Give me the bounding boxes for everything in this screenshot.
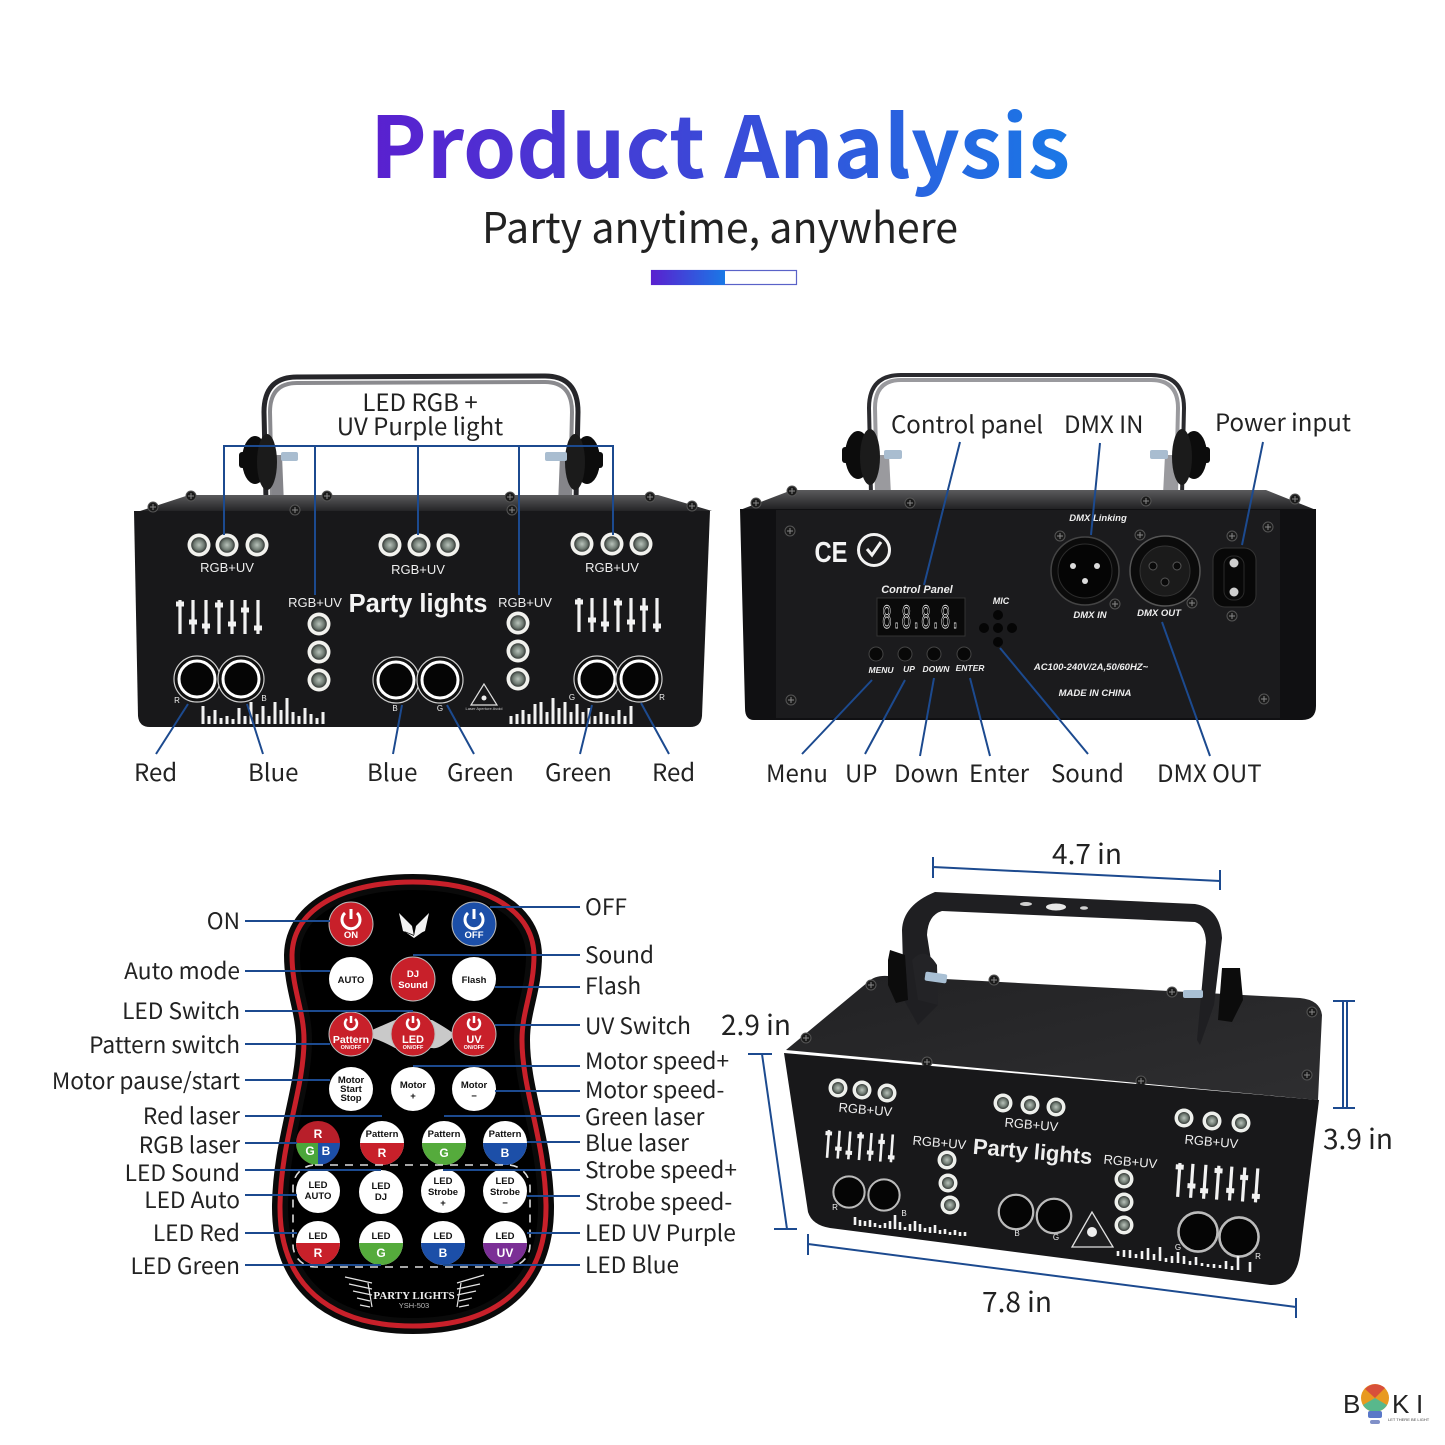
right labels: Strobe speed+ [585,1152,737,1185]
button OFF [452,902,496,946]
button Pattern G: G [439,1146,449,1160]
remote body [280,882,546,1326]
panel: front view of light [134,376,712,788]
mic [979,596,1017,647]
dimension height 3.9 in [1323,1001,1393,1158]
laser warning triangle: Laser Aperture Avoid [465,706,503,711]
callout: LED RGB + UV [224,383,613,595]
button RGB: G [305,1144,315,1158]
handle rear [869,375,1184,495]
party lights logo: YSH-503 [399,1301,429,1310]
button LED R: R [314,1246,323,1260]
left labels: Red laser [143,1098,240,1131]
labels 3D: Party lights [972,1134,1093,1169]
labels 3D: RGB+UV [1103,1152,1158,1171]
device labels [174,560,665,713]
top labels rear: Power input [1215,403,1351,438]
right leader lines [413,907,580,1265]
device labels: R [174,696,180,705]
right labels [585,889,737,1280]
labels 3D: RGB+UV [1004,1115,1059,1134]
button Motor Start Stop [329,1067,373,1111]
dimension width 4.7 in: 4.7 in [1052,833,1122,873]
right labels: LED Blue [585,1247,679,1280]
bottom callouts front: Red [652,753,695,788]
button LED B: LED [434,1231,453,1242]
button LED AUTO [296,1169,340,1213]
button Pattern R: R [378,1146,387,1160]
button LED Strobe minus [483,1169,527,1213]
panel: remote control [52,882,737,1326]
right labels: Motor speed+ [585,1043,729,1076]
labels 3D: R [832,1203,838,1212]
bottom labels rear: Menu [766,754,828,789]
party lights logo: PARTY LIGHTS [373,1290,455,1302]
lenses [174,656,662,703]
button LED R [296,1221,340,1265]
DMX OUT connector [1130,536,1200,606]
right labels: UV Switch [585,1008,691,1041]
button LED UV: LED [496,1231,515,1242]
bottom labels rear: Down [894,754,959,789]
button LED Strobe minus: Strobe [490,1187,520,1198]
button LED [391,1012,435,1056]
left labels: LED Switch [122,993,240,1026]
power input [1213,548,1256,607]
button DJ Sound: DJ [407,969,419,980]
panel buttons: UP [903,664,915,674]
dimension length 7.8 in [808,1234,1296,1321]
laser warning triangle [465,684,503,711]
title: Product Analysis [370,80,1070,203]
button LED Strobe minus: − [502,1198,508,1209]
top labels rear [891,403,1351,585]
link shape [372,1020,455,1048]
device labels: RGB+UV [288,595,342,610]
logo: BOKI bulb: I [1416,1389,1423,1419]
bottom callouts front: Blue [248,753,298,788]
labels 3D: G [1053,1233,1059,1242]
button AUTO: AUTO [338,975,364,986]
body rear [740,509,1316,720]
knob right [545,434,603,490]
button Flash [452,957,496,1001]
subtitle: Party anytime, anywhere [482,195,958,256]
left labels: Motor pause/start [52,1063,240,1096]
left leader lines [245,921,413,1265]
panel buttons: MENU [868,665,894,675]
body [134,511,710,727]
top plate 3D [786,976,1322,1100]
rear print: AC100-240V/2A,50/60HZ~ [1033,662,1149,673]
button LED Strobe plus [421,1169,465,1213]
device labels: G [437,704,443,713]
panel: 3D view with dimensions [721,833,1393,1321]
left labels: RGB laser [139,1127,240,1160]
button Pattern B [483,1121,527,1165]
device labels: RGB+UV [200,560,254,575]
right labels: Blue laser [585,1125,689,1158]
callout: LED RGB + UV: UV Purple light [337,407,503,442]
bottom callouts front: Green [545,753,612,788]
button Motor Start Stop: Motor [338,1075,364,1086]
right labels: Motor speed- [585,1072,724,1105]
panel buttons [868,647,985,675]
device labels: B [261,694,267,703]
laser warning triangle 3D [1072,1212,1113,1247]
labels 3D: B [1014,1229,1020,1238]
control panel text: Control Panel [881,584,954,596]
button DJ Sound [391,957,435,1001]
handle 3D [902,892,1222,1045]
bottom labels rear: UP [845,754,878,789]
rear print [1033,513,1182,699]
device labels: RGB+UV [498,595,552,610]
sliders 3D [824,1130,1262,1203]
button LED Strobe plus: + [440,1198,446,1209]
device labels: G [569,693,575,702]
panel buttons: ENTER [956,663,985,673]
bottom callouts front: Red [134,753,177,788]
left labels: ON [207,903,240,936]
button LED: ON/OFF [403,1045,424,1051]
dimension width 4.7 in [933,833,1220,890]
display: 8.8.8.8. [882,601,960,639]
button Pattern [329,1012,373,1056]
button Pattern G: Pattern [428,1129,461,1140]
button LED R: LED [308,1231,328,1242]
bottom labels rear: Enter [969,754,1030,789]
bottom labels rear: Sound [1051,754,1124,789]
LEDs [188,532,652,692]
logo: BOKI bulb: K [1392,1389,1410,1419]
dimension length 7.8 in: 7.8 in [982,1281,1052,1321]
CE mark: CE [814,537,848,569]
handle holes [1020,902,1088,910]
logo: BOKI bulb [1343,1384,1430,1424]
device labels: RGB+UV [391,562,445,577]
bottom labels rear: DMX OUT [1157,754,1262,789]
left labels: Pattern switch [89,1027,240,1060]
display [877,598,965,639]
button LED Strobe minus: LED [496,1176,515,1187]
button LED DJ: LED [372,1181,391,1192]
left labels [52,903,240,1281]
panel: rear view of light [740,375,1351,789]
button Pattern B: B [501,1146,510,1160]
button LED UV: UV [497,1246,513,1260]
dimension height 2.9 in [721,1004,797,1229]
labels 3D: R [1255,1252,1261,1261]
right labels: Green laser [585,1099,705,1132]
handle front [264,376,578,505]
level bars [203,698,631,724]
labels 3D [832,1100,1261,1261]
level bars 3D [855,1215,1250,1272]
rear print: DMX Linking [1069,513,1127,524]
bottom labels rear [766,622,1262,789]
button OFF: OFF [464,930,484,941]
button RGB: B [322,1144,331,1158]
button Pattern R [360,1121,404,1165]
labels 3D: RGB+UV [1184,1132,1239,1151]
dimension height 2.9 in: 2.9 in [721,1004,791,1044]
button Pattern: ON/OFF [341,1045,362,1051]
panel buttons: DOWN [923,664,950,674]
button LED Strobe plus: LED [434,1176,453,1187]
logo wings [399,913,429,938]
labels 3D: RGB+UV [838,1100,893,1119]
button Pattern G [422,1121,466,1165]
button LED: LED [402,1034,424,1046]
rear print: DMX IN [1073,610,1108,621]
top plate [134,495,712,513]
left labels: Auto mode [124,953,240,986]
button LED AUTO: AUTO [305,1191,331,1202]
button LED G: G [376,1246,386,1260]
button UV: UV [466,1034,482,1046]
top labels rear: Control panel [891,405,1043,440]
button LED G [359,1221,403,1265]
labels 3D: G [1175,1243,1181,1252]
left labels: LED Green [130,1248,240,1281]
logo: BOKI bulb: LET THERE BE LIGHT [1388,1417,1430,1422]
button ON [329,902,373,946]
button AUTO [329,957,373,1001]
labels 3D: RGB+UV [912,1133,967,1152]
right labels: Flash [585,968,641,1001]
rear print: DMX OUT [1137,608,1182,619]
button Motor plus: Motor [400,1080,426,1091]
button Motor Start Stop: Start [340,1084,363,1095]
button Pattern: Pattern [333,1034,369,1046]
bottom callouts front: Green [447,753,514,788]
rear print: MADE IN CHINA [1059,688,1132,699]
button LED DJ: DJ [375,1192,387,1203]
accent bar [651,270,796,285]
button LED G: LED [372,1231,391,1242]
top labels rear: DMX IN [1064,405,1144,440]
mic: MIC [993,596,1010,606]
button RGB [296,1121,340,1165]
labels 3D: B [901,1209,907,1218]
knob 3D left [888,950,947,1005]
button LED B [421,1221,465,1265]
screws rear [751,486,1300,705]
button Motor minus [452,1067,496,1111]
rear inner panel [776,510,1280,718]
lenses 3D [833,1176,1259,1257]
device labels: RGB+UV [585,560,639,575]
device labels: B [392,704,398,713]
button LED B: B [439,1246,448,1260]
front face 3D [784,1053,1319,1285]
button DJ Sound: Sound [398,980,428,991]
button RGB: R [314,1127,323,1141]
button Flash: Flash [462,975,487,986]
left labels: LED Red [153,1215,240,1248]
top plate rear [740,490,1316,510]
dimension height 3.9 in: 3.9 in [1323,1118,1393,1158]
device labels: R [659,693,665,702]
logo: BOKI bulb: B [1343,1389,1360,1419]
button Motor minus: Motor [461,1080,487,1091]
party lights logo [345,1275,484,1310]
button Motor Start Stop: Stop [340,1093,362,1104]
button ON: ON [344,930,358,941]
device labels: Party lights [349,590,487,618]
top screws [148,491,697,515]
DMX IN connector [1051,537,1119,605]
button Motor minus: − [471,1091,477,1102]
button LED UV [483,1221,527,1265]
left labels: LED Auto [144,1182,240,1215]
button Pattern R: Pattern [366,1129,399,1140]
left labels: LED Sound [125,1155,240,1188]
knob rear left [842,429,902,485]
remote red rim [280,882,546,1326]
knob left [239,434,298,490]
button LED DJ [359,1170,403,1214]
button UV [452,1012,496,1056]
right labels: OFF [585,889,627,922]
button LED AUTO: LED [308,1180,328,1191]
sliders [176,598,661,634]
check mark icon [858,534,890,566]
knob rear right [1150,429,1210,485]
callout: LED RGB + UV: LED RGB + [362,383,478,418]
right labels: LED UV Purple [585,1215,736,1248]
knob 3D right [1183,968,1243,1022]
button Motor plus [391,1067,435,1111]
bottom callouts front [134,703,695,788]
right labels: Sound [585,937,654,970]
bottom callouts front: Blue [367,753,417,788]
button LED Strobe plus: Strobe [428,1187,458,1198]
screws 3D [801,975,1317,1086]
right labels: Strobe speed- [585,1184,732,1217]
dashed LED group [293,1165,530,1267]
button Motor plus: + [410,1091,416,1102]
button UV: ON/OFF [464,1045,485,1051]
LEDs 3D [828,1078,1250,1234]
button Pattern B: Pattern [489,1129,522,1140]
